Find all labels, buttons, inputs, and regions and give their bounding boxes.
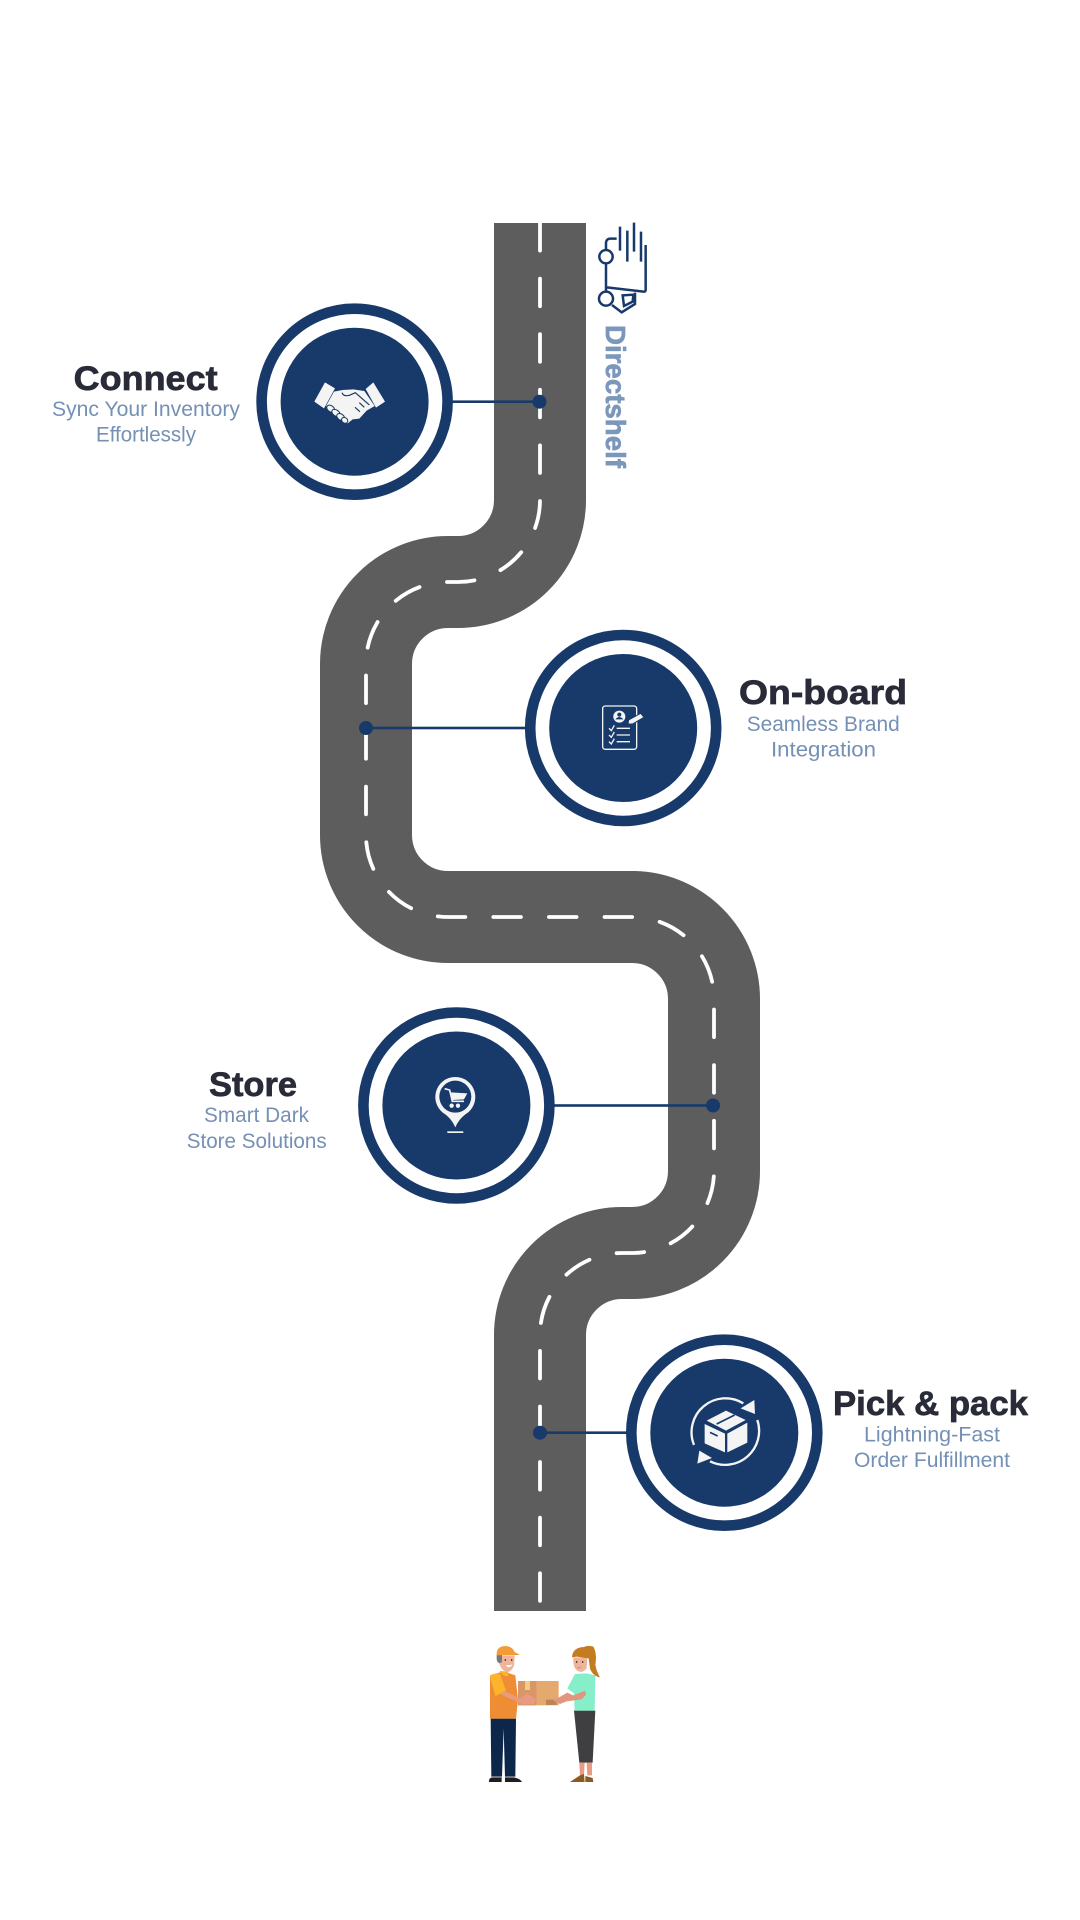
description: Smart Dark (204, 1104, 309, 1127)
icon: delivery truck (599, 223, 646, 312)
description: Integration (771, 739, 876, 762)
step: Store (187, 1012, 720, 1198)
step: Pick & pack (533, 1340, 1028, 1526)
icon: cart location pin (435, 1077, 475, 1133)
description (854, 1424, 1010, 1472)
icon: box with return arrows (692, 1398, 759, 1465)
connector line and dot (552, 1098, 720, 1112)
description: Seamless Brand (747, 713, 900, 736)
badge circle (262, 309, 448, 495)
wordmark: Directshelf (600, 325, 631, 469)
icon: handshake (314, 382, 385, 424)
courier (489, 1646, 536, 1782)
description (52, 398, 240, 447)
description: Store Solutions (187, 1130, 327, 1153)
heading: On-board (739, 674, 907, 712)
description: Order Fulfillment (854, 1449, 1010, 1472)
heading: Connect (74, 360, 218, 398)
icon: clipboard checklist (603, 706, 644, 749)
connector line and dot (359, 721, 528, 735)
description (747, 713, 900, 762)
connector line and dot (533, 1426, 630, 1440)
step: Connect (52, 309, 546, 495)
description (187, 1104, 327, 1153)
badge circle (530, 635, 716, 821)
description: Effortlessly (96, 424, 196, 447)
step: On-board (359, 635, 907, 821)
connector line and dot (450, 395, 546, 409)
road (366, 223, 714, 1611)
customer (553, 1646, 600, 1782)
badge circle (363, 1012, 549, 1198)
heading: Pick & pack (833, 1385, 1028, 1423)
heading: Store (209, 1066, 297, 1104)
parcel box (518, 1681, 559, 1705)
description: Lightning-Fast (864, 1424, 1000, 1447)
description: Sync Your Inventory (52, 398, 240, 421)
logo: Directshelf truck and wordmark (599, 223, 646, 469)
illustration: courier handing a box to a customer (489, 1646, 600, 1782)
badge circle (631, 1340, 817, 1526)
